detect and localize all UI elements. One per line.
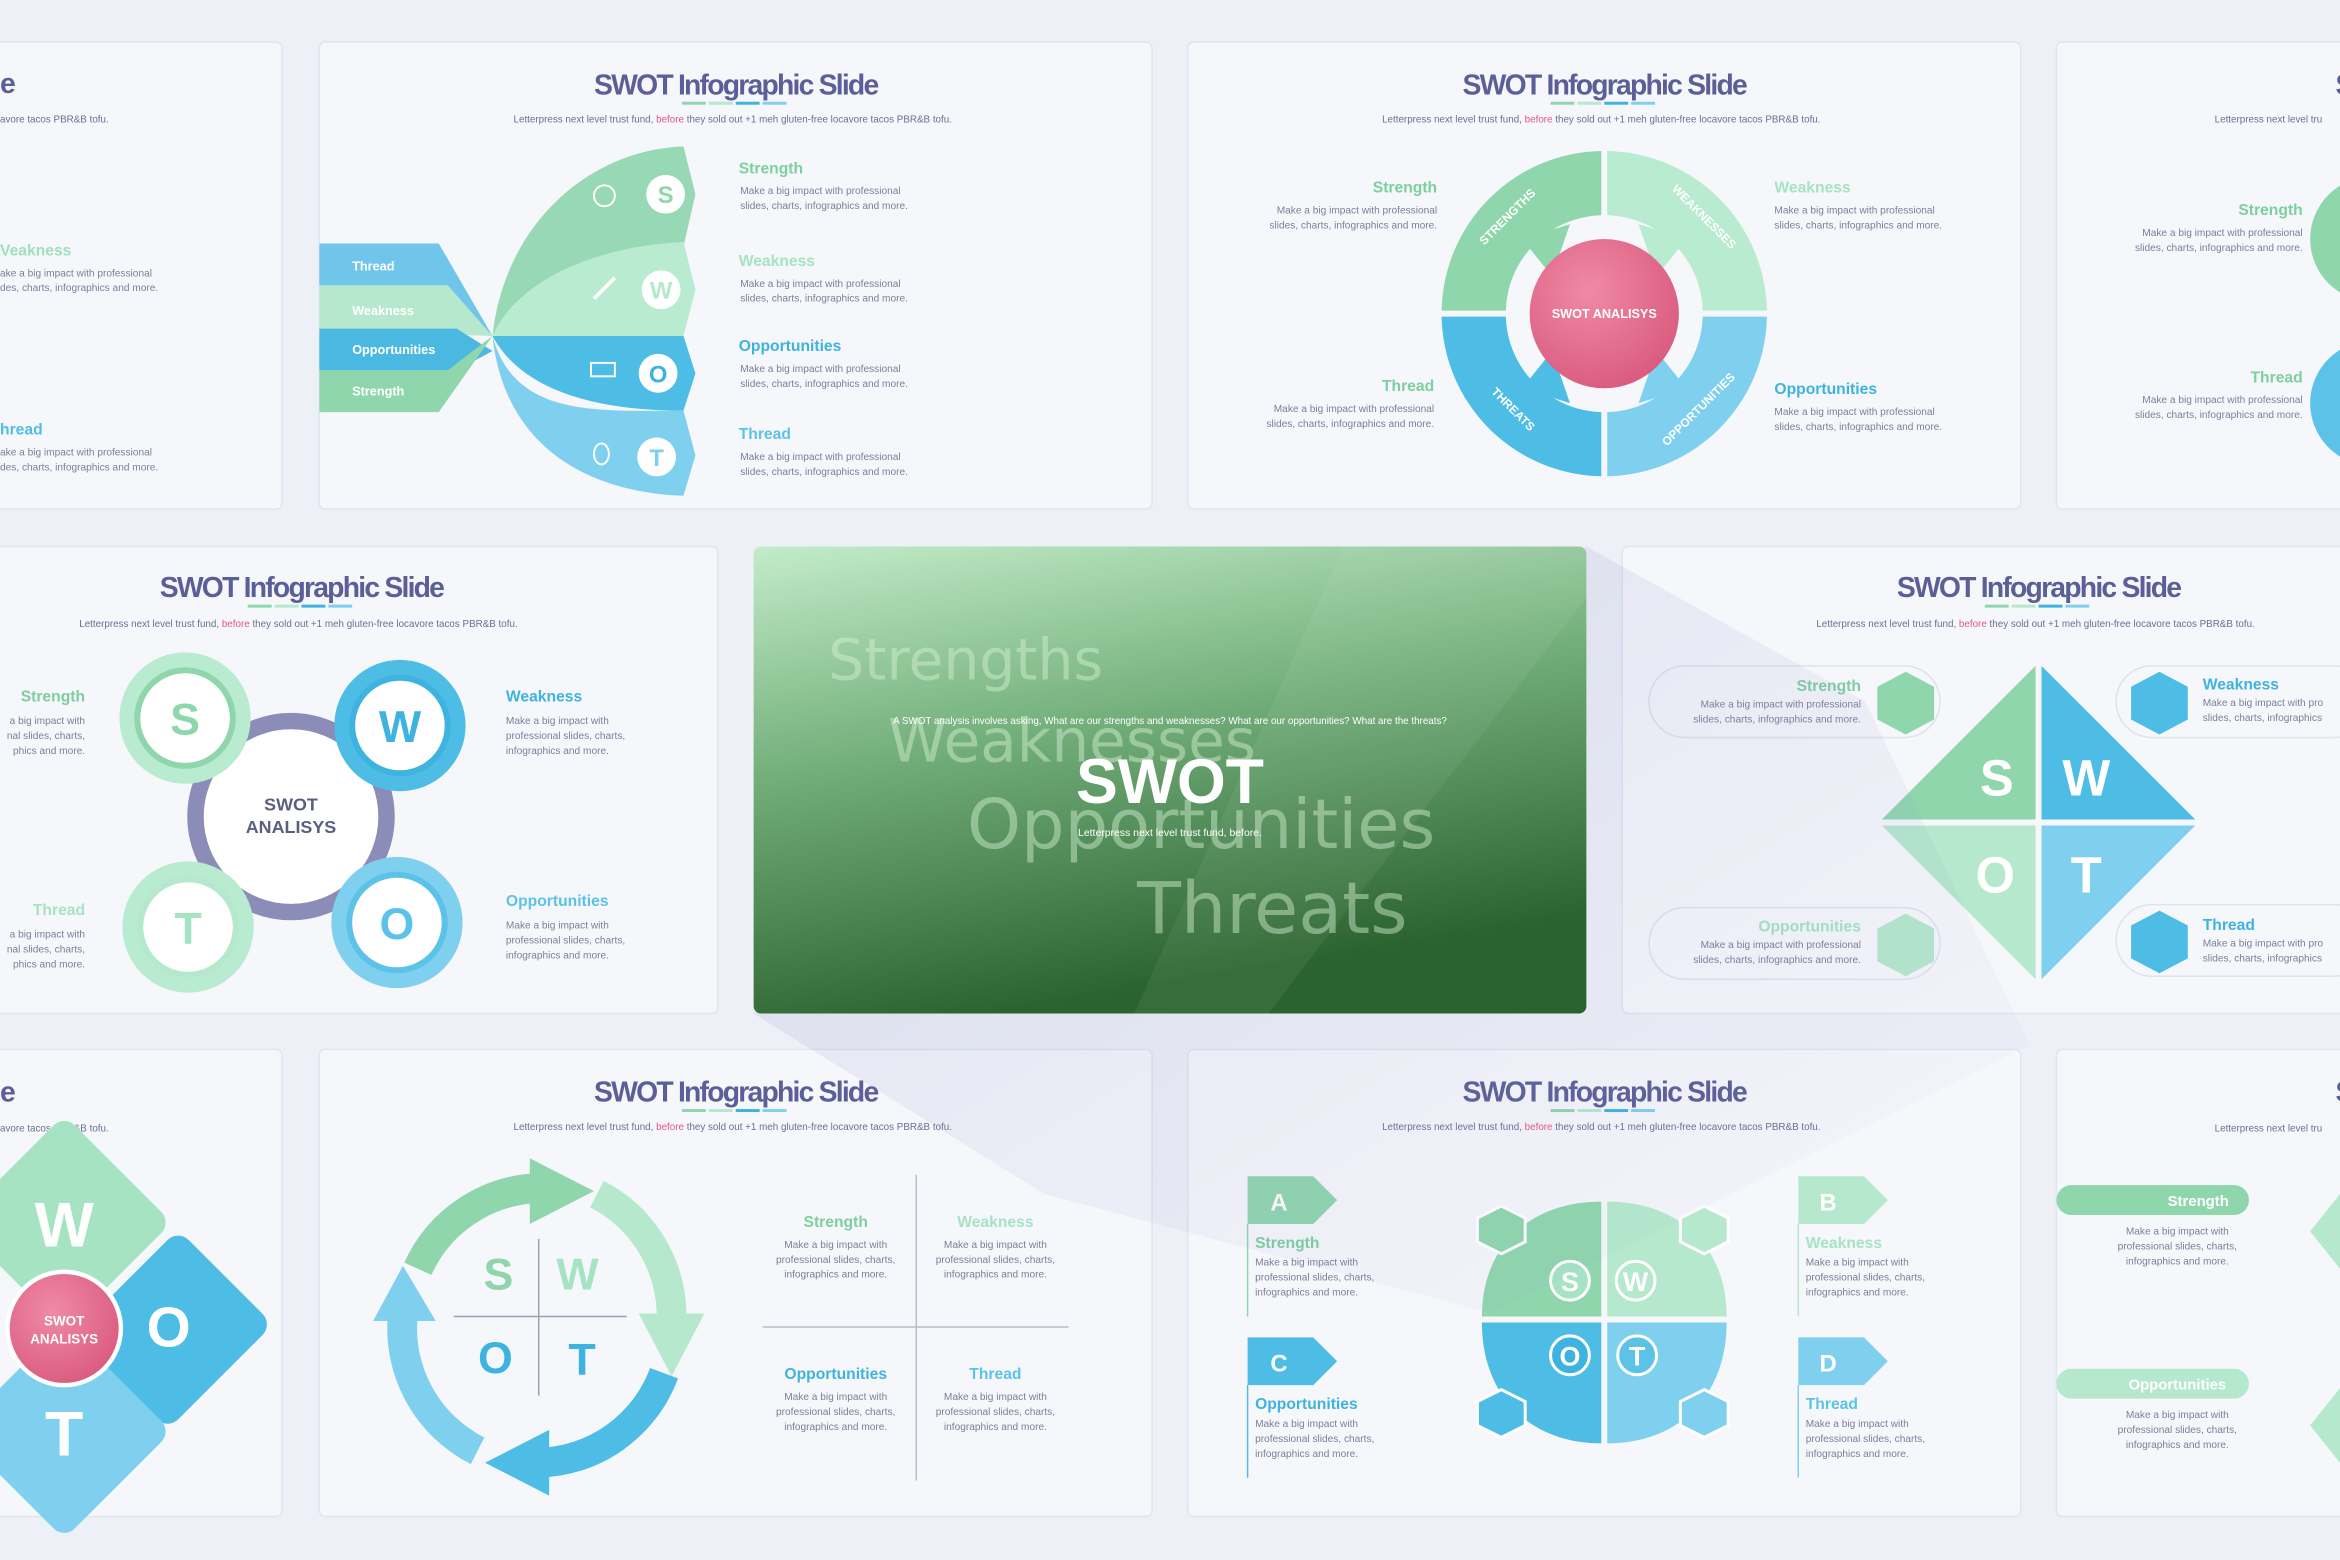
ring: WEAKNESSES bbox=[1669, 182, 1739, 252]
panel: row3 circular arrows: Strength bbox=[804, 1214, 868, 1231]
panel: row3 right partial: infographics and more. bbox=[2126, 1440, 2229, 1451]
panel: row1 ring SWOT: Letterpress next level trust fund, before they sold out +1 meh gluten-free locavore tacos PBR&B tofu. bbox=[1382, 115, 1821, 126]
panel: row3 ABCD: C bbox=[1270, 1351, 1288, 1378]
panel: row2 left circles: Weakness bbox=[506, 689, 582, 706]
ring: OPPORTUNITIES bbox=[1659, 370, 1738, 449]
ring: STRENGTHS bbox=[1476, 186, 1538, 248]
panel: row3 ABCD: O bbox=[1559, 1342, 1580, 1372]
petals: O bbox=[649, 361, 667, 388]
petals: S bbox=[658, 182, 674, 209]
panel: row3 right partial: Opportunities bbox=[2128, 1377, 2226, 1394]
panel: row1 right partial: Thread bbox=[2250, 369, 2303, 386]
panel: row3 left partial diamond: e bbox=[0, 1077, 15, 1109]
panel: center green cover: Letterpress next level trust fund, before. bbox=[1078, 828, 1262, 839]
panel: row1 ring SWOT: Make a big impact with professional bbox=[1774, 206, 1935, 217]
title: SWOT Infographic Slide bbox=[594, 69, 878, 101]
panel: row3 circular arrows: infographics and more. bbox=[784, 1270, 887, 1281]
panel: row3 circular arrows: infographics and more. bbox=[944, 1422, 1047, 1433]
panel: row3 ABCD: SWOT Infographic Slide bbox=[1463, 1077, 1747, 1109]
panel: row3 circular arrows: infographics and more. bbox=[944, 1270, 1047, 1281]
panel: row3 left partial diamond: avore tacos PBR&B tofu. bbox=[0, 1123, 109, 1134]
panel: row3 right partial: Letterpress next level tru bbox=[2215, 1123, 2322, 1134]
panel: row3 right partial: professional slides, charts, bbox=[2118, 1425, 2237, 1436]
panel: row3 ABCD: infographics and more. bbox=[1255, 1288, 1358, 1299]
tabs: Thread bbox=[352, 259, 394, 273]
panel: row1 ring SWOT: slides, charts, infographics and more. bbox=[1269, 221, 1437, 232]
texts: Thread bbox=[739, 426, 791, 443]
panel: row1 left partial: e bbox=[0, 68, 15, 100]
panel: row2 right diamond: Opportunities bbox=[1758, 918, 1861, 935]
panel: row3 left partial diamond: T bbox=[45, 1399, 83, 1469]
panel: row1 right partial: Strength bbox=[2238, 202, 2303, 219]
panel: row3 ABCD bbox=[1188, 1049, 2021, 1516]
panel: row2 right diamond: Weakness bbox=[2203, 677, 2279, 694]
panel: row1 left partial: des, charts, infographics and more. bbox=[0, 283, 158, 294]
panel: row1 right partial: slides, charts, infographics and more. bbox=[2135, 243, 2303, 254]
panel: row1 ring SWOT: Thread bbox=[1382, 378, 1434, 395]
panel: row2 left circles: nal slides, charts, bbox=[7, 731, 85, 742]
panel: row1 ring SWOT: Make a big impact with professional bbox=[1774, 407, 1935, 418]
panel: row1 left partial: des, charts, infographics and more. bbox=[0, 462, 158, 473]
panel: row2 right diamond: slides, charts, infographics bbox=[2203, 953, 2322, 964]
panel: row3 ABCD: infographics and more. bbox=[1806, 1449, 1909, 1460]
panel: row3 left partial diamond bbox=[0, 1049, 282, 1539]
ring: SWOT ANALISYS bbox=[1552, 307, 1657, 321]
panel: row1 ring SWOT: slides, charts, infographics and more. bbox=[1774, 221, 1942, 232]
texts: Make a big impact with professional bbox=[740, 452, 901, 463]
panel: row3 circular arrows: Weakness bbox=[957, 1214, 1034, 1231]
petals: W bbox=[650, 278, 673, 305]
texts: slides, charts, infographics and more. bbox=[740, 294, 908, 305]
panel: row2 right diamond: W bbox=[2062, 750, 2110, 807]
panel: row1 ring SWOT: Strength bbox=[1373, 180, 1437, 197]
panel: row1 right partial: Letterpress next level tru bbox=[2215, 115, 2322, 126]
panel: row1 left partial: ake a big impact with professional bbox=[0, 447, 152, 458]
panel: row2 left circles: professional slides, charts, bbox=[506, 935, 625, 946]
panel: row3 circular arrows: professional slides, charts, bbox=[936, 1255, 1055, 1266]
panel: row2 right diamond: O bbox=[1976, 847, 2015, 904]
panel: row3 circular arrows: W bbox=[556, 1250, 599, 1300]
panel: row3 circular arrows: S bbox=[484, 1250, 513, 1300]
panel: row2 left circles: nal slides, charts, bbox=[7, 944, 85, 955]
panel: row1 right partial: Make a big impact with professional bbox=[2142, 395, 2303, 406]
panel: row2 left circles: ANALISYS bbox=[246, 817, 336, 837]
panel: row2 left circles: Strength bbox=[21, 689, 85, 706]
texts: slides, charts, infographics and more. bbox=[740, 201, 908, 212]
panel: row3 ABCD: B bbox=[1820, 1190, 1837, 1217]
texts: slides, charts, infographics and more. bbox=[740, 379, 908, 390]
panel: row1 right partial bbox=[2056, 42, 2340, 509]
panel: row3 right partial: Strength bbox=[2168, 1193, 2229, 1210]
panel: row3 left partial diamond: ANALISYS bbox=[30, 1331, 98, 1346]
panel: row2 right diamond: Strength bbox=[1797, 678, 1861, 695]
panel: row3 ABCD: Thread bbox=[1806, 1396, 1858, 1413]
panel: row3 ABCD: A bbox=[1270, 1190, 1288, 1217]
panel: center green cover: Threats bbox=[1136, 867, 1408, 950]
panel: row3 left partial diamond: W bbox=[35, 1190, 95, 1260]
panel: row2 left circles: phics and more. bbox=[13, 959, 85, 970]
tabs: Opportunities bbox=[352, 343, 435, 357]
panel: row3 ABCD: Make a big impact with bbox=[1806, 1419, 1909, 1430]
panel: row3 ABCD: Make a big impact with bbox=[1806, 1258, 1909, 1269]
panel: row2 left circles bbox=[0, 546, 718, 1014]
panel: center green cover: Opportunities bbox=[967, 785, 1435, 865]
panel: row2 left circles: Opportunities bbox=[506, 893, 609, 910]
panel: row3 circular arrows: Make a big impact with bbox=[784, 1392, 887, 1403]
panel: row3 ABCD: professional slides, charts, bbox=[1806, 1434, 1925, 1445]
petals: T bbox=[649, 445, 664, 472]
panel: row1 right partial: slides, charts, infographics and more. bbox=[2135, 410, 2303, 421]
panel: row3 right partial: Make a big impact with bbox=[2126, 1410, 2229, 1421]
panel: row2 right diamond: S bbox=[1980, 750, 2014, 807]
texts: slides, charts, infographics and more. bbox=[740, 467, 908, 478]
panel: row2 left circles: Make a big impact with bbox=[506, 920, 609, 931]
panel: row1 left partial bbox=[0, 42, 282, 509]
panel: row1 ring SWOT: SWOT Infographic Slide bbox=[1463, 69, 1747, 101]
panel: row3 left partial diamond: SWOT bbox=[44, 1313, 85, 1328]
panel: row2 right diamond: Make a big impact with professional bbox=[1701, 700, 1861, 711]
panel: row3 ABCD: professional slides, charts, bbox=[1255, 1434, 1374, 1445]
panel: row2 left circles: Thread bbox=[33, 902, 85, 919]
panel: row2 left circles: SWOT Infographic Slide bbox=[160, 572, 444, 604]
panel: row1 ring SWOT: slides, charts, infographics and more. bbox=[1266, 419, 1434, 430]
panel: row1 left partial: avore tacos PBR&B tofu. bbox=[0, 115, 109, 126]
panel: row1 ring SWOT: Opportunities bbox=[1774, 381, 1877, 398]
tabs bbox=[319, 244, 492, 412]
panel: row2 right diamond bbox=[1622, 546, 2340, 1014]
panel: row3 circular arrows: Opportunities bbox=[784, 1366, 887, 1383]
panel: row2 left circles: O bbox=[380, 899, 414, 949]
panel: row2 left circles: W bbox=[379, 702, 422, 752]
texts bbox=[739, 160, 908, 478]
texts: Opportunities bbox=[739, 338, 842, 355]
panel: center green cover: Weaknesses bbox=[888, 707, 1256, 776]
panel: row3 circular arrows: Thread bbox=[969, 1366, 1021, 1383]
panel: row1 left partial: hread bbox=[0, 422, 43, 439]
panel: row2 left circles: T bbox=[174, 903, 202, 953]
panel: row2 left circles: phics and more. bbox=[13, 746, 85, 757]
panel: row1 left partial: ake a big impact with professional bbox=[0, 268, 152, 279]
panel: center green cover: Strengths bbox=[828, 627, 1103, 693]
panel: row2 left circles: SWOT bbox=[264, 795, 318, 815]
panel: row3 right partial bbox=[2056, 1049, 2340, 1516]
panel: row3 circular arrows: professional slides, charts, bbox=[776, 1255, 895, 1266]
panel: row2 left circles: S bbox=[170, 694, 200, 744]
panel: row1 ring SWOT bbox=[1188, 42, 2021, 509]
panel: row3 left partial diamond: O bbox=[147, 1296, 191, 1359]
panel: row2 right diamond: Thread bbox=[2203, 917, 2255, 934]
panel: row3 ABCD: professional slides, charts, bbox=[1255, 1273, 1374, 1284]
panel: row3 ABCD: Letterpress next level trust fund, before they sold out +1 meh gluten-free locavore tacos PBR&B tofu. bbox=[1382, 1122, 1821, 1133]
panel: row1 petal SWOT bbox=[319, 42, 1152, 509]
panel: row3 right partial: professional slides, charts, bbox=[2118, 1241, 2237, 1252]
tabs: Weakness bbox=[352, 304, 414, 318]
panel: row2 right diamond: slides, charts, infographics and more. bbox=[1693, 955, 1861, 966]
panel: row3 ABCD: Strength bbox=[1255, 1235, 1319, 1252]
panel: row3 ABCD: Opportunities bbox=[1255, 1396, 1358, 1413]
panel: row2 left circles: infographics and more. bbox=[506, 746, 609, 757]
panel: row2 left circles: infographics and more. bbox=[506, 950, 609, 961]
panel: row3 ABCD: S bbox=[1561, 1267, 1579, 1297]
panel: row1 ring SWOT: Make a big impact with professional bbox=[1274, 404, 1434, 415]
texts: Weakness bbox=[739, 253, 815, 270]
panel: row3 circular arrows: Make a big impact with bbox=[784, 1240, 887, 1251]
panel: row3 circular arrows: Make a big impact with bbox=[944, 1392, 1047, 1403]
tabs: Strength bbox=[352, 385, 404, 399]
panel: row2 left circles: Letterpress next level trust fund, before they sold out +1 meh gluten-free locavore tacos PBR&B tofu. bbox=[79, 619, 518, 630]
panel: row3 circular arrows: O bbox=[478, 1333, 513, 1383]
subtitle: Letterpress next level trust fund, before they sold out +1 meh gluten-free locavore tacos PBR&B tofu. bbox=[514, 115, 952, 126]
panel: row3 circular arrows: infographics and more. bbox=[784, 1422, 887, 1433]
panel: row2 right diamond: slides, charts, infographics and more. bbox=[1693, 715, 1861, 726]
panel: center green cover: A SWOT analysis involves asking, What are our strengths and weaknesses? What are our opportunities? What are the threats? bbox=[893, 716, 1447, 727]
texts: Make a big impact with professional bbox=[740, 186, 901, 197]
panel: row2 right diamond: Make a big impact with pro bbox=[2203, 698, 2324, 709]
panel: row1 ring SWOT: Make a big impact with professional bbox=[1277, 206, 1437, 217]
panel: row2 left circles: a big impact with bbox=[10, 716, 85, 727]
panel: row3 circular arrows: professional slides, charts, bbox=[936, 1407, 1055, 1418]
panel: row3 circular arrows: Letterpress next level trust fund, before they sold out +1 meh gluten-free locavore tacos PBR&B tofu. bbox=[514, 1122, 952, 1133]
panel: row3 ABCD: Make a big impact with bbox=[1255, 1258, 1358, 1269]
panel: row2 right diamond: T bbox=[2071, 847, 2102, 904]
panel: row3 ABCD: Weakness bbox=[1806, 1235, 1882, 1252]
panel: row1 left partial: Veakness bbox=[0, 242, 72, 259]
panel: row2 right diamond: Letterpress next level trust fund, before they sold out +1 meh gluten-free locavore tacos PBR&B tofu. bbox=[1816, 619, 2255, 630]
panel: row3 right partial: infographics and more. bbox=[2126, 1256, 2229, 1267]
panel: row2 right diamond: slides, charts, infographics bbox=[2203, 713, 2322, 724]
panel: row2 left circles: a big impact with bbox=[10, 929, 85, 940]
panel: row3 ABCD: W bbox=[1623, 1267, 1649, 1297]
panel: center green cover: SWOT bbox=[1076, 747, 1264, 817]
panel: row1 ring SWOT: slides, charts, infographics and more. bbox=[1774, 422, 1942, 433]
panel: row3 circular arrows: T bbox=[568, 1335, 596, 1385]
texts: Make a big impact with professional bbox=[740, 279, 901, 290]
panel: row3 ABCD: T bbox=[1629, 1342, 1646, 1372]
panel: row2 right diamond: Make a big impact with professional bbox=[1701, 940, 1861, 951]
panel: row2 left circles: Make a big impact with bbox=[506, 716, 609, 727]
panel: row3 ABCD: infographics and more. bbox=[1255, 1449, 1358, 1460]
panel: center green cover bbox=[754, 546, 1586, 1014]
shadow bbox=[754, 546, 2030, 1314]
panel: row3 ABCD: infographics and more. bbox=[1806, 1288, 1909, 1299]
panel: row3 circular arrows bbox=[319, 1049, 1152, 1516]
texts: Strength bbox=[739, 160, 803, 177]
petals bbox=[492, 146, 695, 496]
panel: row3 ABCD: D bbox=[1820, 1351, 1837, 1378]
panel: row3 circular arrows: professional slides, charts, bbox=[776, 1407, 895, 1418]
panel: row2 right diamond: Make a big impact with pro bbox=[2203, 938, 2324, 949]
ring bbox=[1442, 151, 1767, 476]
texts: Make a big impact with professional bbox=[740, 364, 901, 375]
ring: THREATS bbox=[1489, 385, 1538, 434]
panel: row3 circular arrows: Make a big impact with bbox=[944, 1240, 1047, 1251]
panel: row3 ABCD: Make a big impact with bbox=[1255, 1419, 1358, 1430]
panel: row3 circular arrows: SWOT Infographic Slide bbox=[594, 1077, 878, 1109]
panel: row1 ring SWOT: Weakness bbox=[1774, 180, 1851, 197]
panel: row2 left circles: professional slides, charts, bbox=[506, 731, 625, 742]
panel: row1 right partial: Make a big impact with professional bbox=[2142, 228, 2303, 239]
panel: row2 right diamond: SWOT Infographic Slide bbox=[1897, 572, 2181, 604]
panel: row3 ABCD: professional slides, charts, bbox=[1806, 1273, 1925, 1284]
panel: row3 right partial: Make a big impact with bbox=[2126, 1226, 2229, 1237]
